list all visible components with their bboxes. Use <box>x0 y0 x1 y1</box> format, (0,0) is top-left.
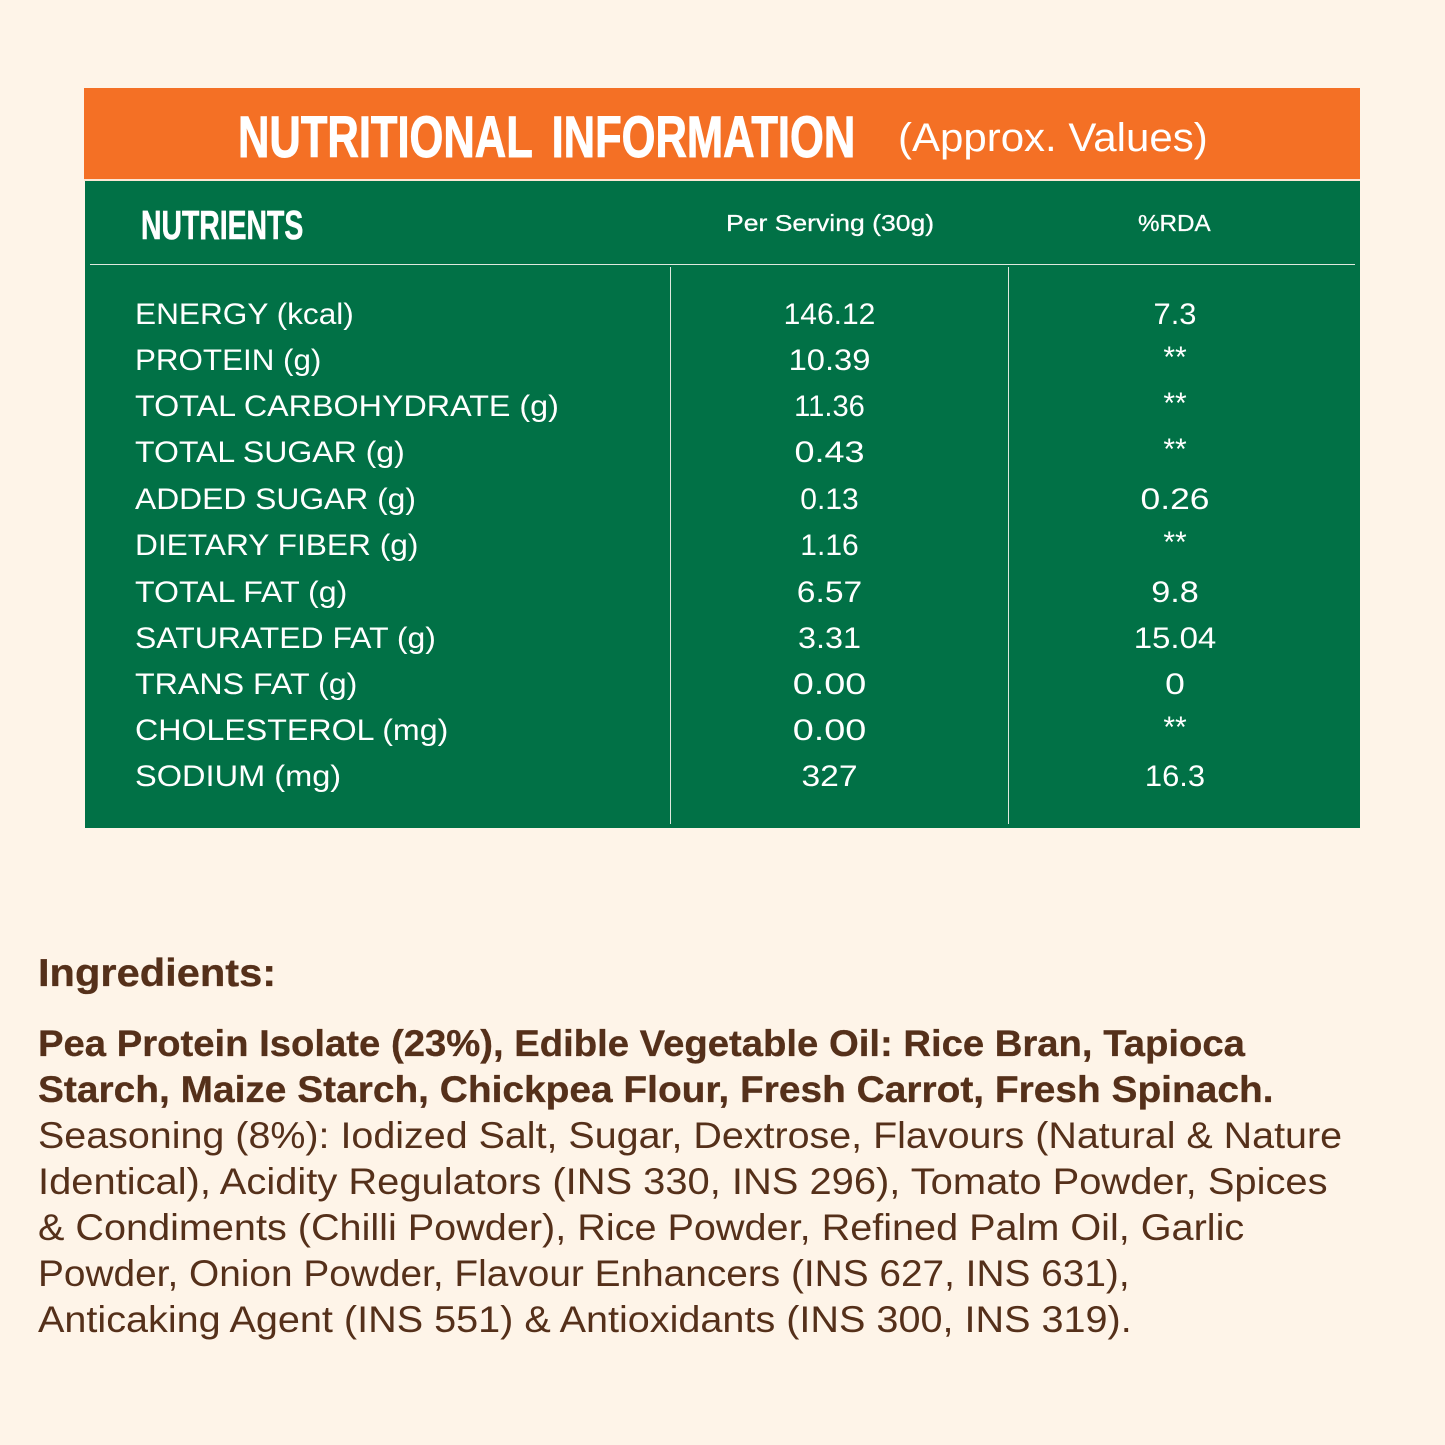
row: total fat: TOTAL FAT (g) <box>135 576 347 609</box>
ingredients text <box>38 1023 1342 1340</box>
row: added sugar: ADDED SUGAR (g) <box>135 483 416 516</box>
row: cholesterol: 0.00 <box>793 714 866 747</box>
row: trans fat: TRANS FAT (g) <box>135 668 357 701</box>
row: trans fat: 0 <box>1165 668 1185 701</box>
row: saturated fat <box>135 622 1216 655</box>
row: sodium: SODIUM (mg) <box>135 760 341 793</box>
row: dietary fiber: DIETARY FIBER (g) <box>135 529 418 562</box>
ingredients text: & Condiments (Chilli Powder), Rice Powder, Refined Palm Oil, Garlic <box>38 1207 1244 1248</box>
row: sodium: 327 <box>801 760 858 793</box>
row: total sugar <box>135 433 1187 469</box>
row: energy: ENERGY (kcal) <box>135 298 354 331</box>
row: cholesterol: ** <box>1163 711 1187 744</box>
row: carbohydrate: TOTAL CARBOHYDRATE (g) <box>135 390 559 423</box>
title: NUTRITIONAL INFORMATION <box>238 105 855 170</box>
row: cholesterol <box>135 711 1187 747</box>
row: trans fat: 0.00 <box>793 668 866 701</box>
title banner <box>84 88 1360 179</box>
ingredients heading: Ingredients: <box>38 952 276 995</box>
row: saturated fat: 3.31 <box>798 622 861 655</box>
row: added sugar: 0.13 <box>800 483 859 516</box>
row: carbohydrate: ** <box>1163 387 1187 420</box>
row: cholesterol: CHOLESTEROL (mg) <box>135 714 448 747</box>
row: total fat: 9.8 <box>1151 576 1199 609</box>
row: sodium: 16.3 <box>1145 760 1205 793</box>
row: sodium <box>135 760 1205 793</box>
column heading: nutrients: NUTRIENTS <box>141 202 303 248</box>
row: total sugar: 0.43 <box>794 436 865 469</box>
row: protein <box>135 341 1187 377</box>
subtitle: (Approx. Values) <box>898 116 1208 160</box>
ingredients text: Anticaking Agent (INS 551) & Antioxidants (INS 300, INS 319). <box>38 1299 1132 1340</box>
row: protein: 10.39 <box>789 344 870 377</box>
ingredients text: Starch, Maize Starch, Chickpea Flour, Fresh Carrot, Fresh Spinach. <box>38 1069 1274 1110</box>
row: energy: 7.3 <box>1154 298 1196 331</box>
row: total sugar: TOTAL SUGAR (g) <box>135 436 405 469</box>
row: dietary fiber: 1.16 <box>800 529 859 562</box>
row: saturated fat: 15.04 <box>1134 622 1216 655</box>
row: carbohydrate <box>135 387 1187 423</box>
row: trans fat <box>135 668 1185 701</box>
row: protein: PROTEIN (g) <box>135 344 321 377</box>
row: protein: ** <box>1163 341 1187 374</box>
row: total fat: 6.57 <box>797 576 862 609</box>
ingredients text: Identical), Acidity Regulators (INS 330, INS 296), Tomato Powder, Spices <box>38 1161 1328 1202</box>
row: dietary fiber: ** <box>1163 526 1187 559</box>
ingredients text: Pea Protein Isolate (23%), Edible Vegetable Oil: Rice Bran, Tapioca <box>38 1023 1245 1064</box>
row: energy: 146.12 <box>784 298 875 331</box>
row: added sugar <box>135 483 1209 516</box>
row: carbohydrate: 11.36 <box>794 390 865 423</box>
row: total fat <box>135 576 1199 609</box>
ingredients text: Powder, Onion Powder, Flavour Enhancers (INS 627, INS 631), <box>38 1253 1130 1294</box>
row: saturated fat: SATURATED FAT (g) <box>135 622 436 655</box>
row: dietary fiber <box>135 526 1187 562</box>
row: energy <box>135 298 1196 331</box>
row: added sugar: 0.26 <box>1141 483 1209 516</box>
column heading: rda: %RDA <box>1138 210 1211 236</box>
panel: nutrition table <box>85 88 1360 828</box>
column heading: per serving: Per Serving (30g) <box>726 210 934 236</box>
ingredients text: Seasoning (8%): Iodized Salt, Sugar, Dextrose, Flavours (Natural & Nature <box>38 1115 1342 1156</box>
row: total sugar: ** <box>1163 433 1187 466</box>
